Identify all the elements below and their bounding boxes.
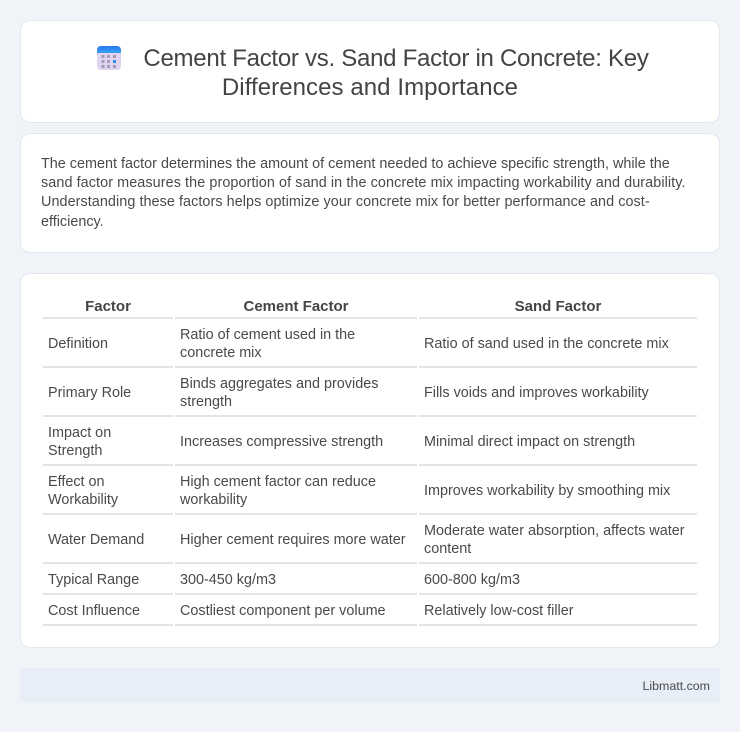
row: water demand: Moderate water absorption, affects water [424, 523, 684, 539]
row: typical range: 300-450 kg/m3 [180, 572, 276, 588]
row: impact on strength: Strength [48, 443, 102, 459]
row: effect on workability: Workability [48, 492, 118, 508]
row: cost influence [48, 603, 574, 619]
row: impact on strength: Minimal direct impact on strength [424, 434, 635, 450]
text block: introduction: Understanding these factors helps optimize your concrete mix for better performance and cost- [41, 194, 650, 210]
row: effect on workability [48, 474, 670, 508]
title: Cement Factor vs. Sand Factor in Concrete: Key [143, 45, 649, 72]
row: primary role: Fills voids and improves workability [424, 385, 649, 401]
row: definition: Ratio of sand used in the concrete mix [424, 336, 669, 352]
footer [20, 668, 720, 702]
panel: comparison table [20, 273, 720, 648]
table: comparison [43, 298, 697, 626]
row: effect on workability: workability [180, 492, 247, 508]
table header [85, 298, 602, 315]
row: definition: concrete mix [180, 345, 262, 361]
text block: introduction: efficiency. [41, 214, 104, 230]
row: typical range: Typical Range [48, 572, 139, 588]
row: impact on strength [48, 425, 635, 459]
row: water demand: Water Demand [48, 532, 144, 548]
row: definition: Ratio of cement used in the [180, 327, 355, 343]
row: effect on workability: High cement factor can reduce [180, 474, 376, 490]
row: water demand [48, 523, 684, 557]
row: definition: Definition [48, 336, 108, 352]
row: water demand: Higher cement requires more water [180, 532, 406, 548]
table header: Sand Factor [515, 298, 601, 315]
icon: calendar [97, 46, 121, 70]
row: impact on strength: Impact on [48, 425, 111, 441]
panel: introduction [20, 133, 720, 253]
row: effect on workability: Improves workability by smoothing mix [424, 483, 670, 499]
row: effect on workability: Effect on [48, 474, 105, 490]
table header: Cement Factor [243, 298, 349, 315]
text block: introduction: sand factor measures the proportion of sand in the concrete mix impacting workability and durability. [41, 175, 686, 191]
title [143, 45, 649, 101]
panel: header [20, 20, 720, 123]
table header: Factor [85, 298, 131, 315]
row: definition [48, 327, 669, 361]
footer credit: Libmatt.com [643, 679, 710, 693]
row: primary role: Binds aggregates and provides [180, 376, 378, 392]
row: impact on strength: Increases compressive strength [180, 434, 383, 450]
title: Differences and Importance [222, 74, 518, 101]
text block: introduction: The cement factor determines the amount of cement needed to achieve specific strength, while the [41, 156, 670, 172]
row: cost influence: Cost Influence [48, 603, 140, 619]
row: primary role: Primary Role [48, 385, 131, 401]
row: cost influence: Relatively low-cost filler [424, 603, 574, 619]
row: water demand: content [424, 541, 471, 557]
row: cost influence: Costliest component per volume [180, 603, 386, 619]
text block: introduction [41, 156, 686, 230]
row: primary role: strength [180, 394, 232, 410]
row: primary role [48, 376, 649, 410]
row: typical range [48, 572, 520, 588]
row: typical range: 600-800 kg/m3 [424, 572, 520, 588]
